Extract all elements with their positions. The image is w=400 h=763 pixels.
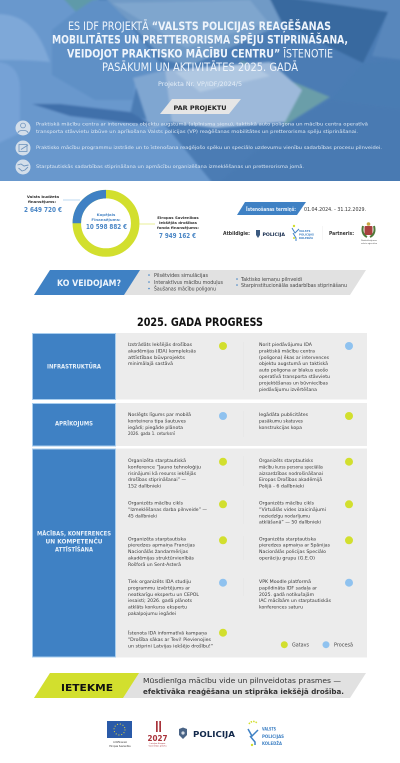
implementation period: Īstenošanas termiņš: <box>246 206 296 213</box>
callout: EU fund: Eiropas Savienības <box>157 215 199 220</box>
item: investigation cycle: 45 dalībnieki <box>128 513 157 519</box>
responsible partners: Atbildīgie: <box>223 231 250 237</box>
item: design: akadēmijas (IDA) kompleksās <box>128 348 197 354</box>
panel: aprikojums <box>32 403 367 446</box>
icon: specialist <box>16 120 30 136</box>
item: exchange Spain: operāciju grupu (G.E.O) <box>259 556 315 562</box>
panel: macibas <box>32 448 367 658</box>
item: tender: operatīvā transporta stāvvietu <box>259 374 330 380</box>
item: investigation cycle: Organizēts mācību cikls <box>128 500 184 506</box>
item: virtual cycle: noziedzīgu nodarījumu <box>259 513 310 519</box>
item: course: Polijā - 6 dalībnieki <box>259 484 304 490</box>
item: course: mācību kurss personu speciālās <box>259 464 323 470</box>
item: conference <box>128 458 227 490</box>
panel: aprikojums: APRĪKOJUMS <box>55 421 93 428</box>
logo: partner emblem: valsts aģentūra <box>361 242 378 245</box>
item: moodle: VPK Moodle platformā <box>259 579 311 585</box>
item: exchange France: Rošforā un Sent-Asterā <box>128 561 181 568</box>
banner: ietekme: IETEKME <box>61 683 113 694</box>
logo: valsts policijas koledza: POLICIJAS <box>262 734 284 740</box>
item: conference: konference “Jauno tehnoloģiju <box>128 464 201 470</box>
item: shooting container: 2026. gada 1. ceturksnī <box>128 431 176 437</box>
item: tender: piedāvājumu izvērtēšana <box>259 386 317 393</box>
logo: EU: Līdzfinansē <box>113 741 127 744</box>
item: conference: 152 dalībnieki <box>128 484 161 490</box>
item: moodle: konferences saturu <box>259 605 303 611</box>
logo: police college <box>292 225 314 241</box>
item: design: attīstības būvprojekts <box>128 355 186 361</box>
logo: 2027: 2027 <box>148 734 168 743</box>
icon: handshake <box>16 160 30 174</box>
donut centre label: 10 598 882 € <box>86 223 127 231</box>
item: design: minimālajā sastāvā <box>128 361 173 367</box>
text: infrastructure: transporta stāvvietu izbūve un aprīkošana Valsts policijas (VP) reaģēšanas mobilitātes un pretterorisma spēju stiprināšanai. <box>36 128 358 135</box>
logo: EU: Eiropas Savienība <box>109 745 131 748</box>
legend: Gatavs <box>292 643 309 649</box>
logo: partner emblem: Nodrošinājuma <box>361 239 378 242</box>
item: stage: konstrukcijas kopa <box>259 425 302 431</box>
item: tender: praktiskā mācību centra <box>259 348 315 354</box>
text: infrastructure <box>36 122 368 134</box>
row label: ATTĪSTĪŠANA <box>55 547 93 554</box>
banner: ko veidojam: KO VEIDOJAM? <box>57 279 121 289</box>
item: tender: auto poligona ar blakus esošo <box>259 367 328 374</box>
banner: ietekme: efektīvāka reaģēšana un stiprāka iekšējā drošība. <box>143 688 344 696</box>
item: stage: pasākumu skatuves <box>259 418 304 424</box>
item: campaign: un stiprini Latvijas iekšējo drošību!" <box>128 642 213 650</box>
heading: par projektu: PAR PROJEKTU <box>174 104 226 112</box>
item: exchange Spain: pieredzes apmaiņa ar Spānijas <box>259 543 331 549</box>
item: design <box>128 341 227 367</box>
item: study evaluation: pakalpojumu iegādei <box>128 611 176 617</box>
item: investigation cycle <box>128 500 227 519</box>
item: shooting container: konteinera tipa šautuves <box>128 417 187 424</box>
logo: 2027: Savienības pilsēta <box>148 744 167 748</box>
title: VEIDOJOT PRAKTISKO MĀCĪBU CENTRU” ĪSTENOTIE <box>67 46 333 60</box>
item: stage: Iegādāta publicitātes <box>259 412 309 418</box>
item: exchange France: Organizēta starptautiska <box>128 536 186 542</box>
donut centre label <box>86 212 127 231</box>
icon: document <box>16 140 30 156</box>
item: exchange Spain <box>259 536 353 562</box>
responsible partners: Partneris: <box>329 231 354 237</box>
item: virtual cycle <box>259 500 353 526</box>
item: course: Organizēts starptautisks <box>259 458 314 464</box>
item: moodle: IAC mācībām un starptautiskās <box>259 598 332 604</box>
callout: state budget: 2 649 720 € <box>24 206 62 214</box>
item: tender <box>259 342 353 393</box>
logo: valsts policijas koledza <box>248 721 284 747</box>
item: conference: drošības stiprināšanai” — <box>128 476 186 483</box>
item: investigation cycle: “Izmeklēšanas darba pilnveide” — <box>128 506 207 513</box>
item: exchange France: pieredzes apmaiņa Francijas <box>128 543 196 549</box>
logo: partner emblem <box>361 222 378 245</box>
banner: ietekme: Mūsdienīga mācību vide un pilnveidotas prasmes — <box>143 677 341 685</box>
banner: ietekme <box>34 673 366 698</box>
item: campaign <box>128 629 227 650</box>
callout: EU fund: 7 949 162 € <box>159 232 196 240</box>
legend <box>281 641 353 649</box>
logo: police college: VALSTS <box>299 229 310 233</box>
item: campaign: "Drošība sākas ar Tevi! Pievienojies <box>128 636 212 643</box>
donut chart: financing <box>77 194 135 252</box>
callout: EU fund: Iekšējās drošības <box>159 220 198 225</box>
item: tender: (poligona) ēkas ar intervences <box>259 355 330 361</box>
logo: policija <box>179 728 236 739</box>
item: study evaluation: neatkarīgu ekspertu un CEPOL <box>128 592 199 598</box>
item: virtual cycle: atklāšanā” — 50 dalībnieki <box>259 519 321 526</box>
list right: Taktisko iemaņu pilnveidi <box>240 277 302 283</box>
item: design: Izstrādāts Iekšējās drošības <box>128 341 193 348</box>
item: course: Eiropas Drošības akadēmijā <box>259 476 322 483</box>
row label <box>37 531 111 554</box>
logo: police college: POLICIJAS <box>299 232 314 236</box>
item: campaign: Īstenota IDA informatīvā kampaņa <box>128 630 207 637</box>
item: exchange France: akadēmijas struktūrvienībās <box>128 556 195 562</box>
item: moodle: papildināta IDF sadaļa ar <box>259 585 317 591</box>
donut centre label: Finansējums: <box>91 217 121 222</box>
title: ES IDF PROJEKTĀ “VALSTS POLICIJAS REAĢĒŠANAS <box>68 18 331 33</box>
item: shooting container <box>128 412 227 437</box>
list left: Pilsētvides simulācijas <box>154 273 208 279</box>
heading: progress: 2025. GADA PROGRESS <box>137 315 263 329</box>
text: cooperation: Starptautiskās sadarbības stiprināšana un apmācību organizēšana izmeklēšanas un pretterorisma jomā. <box>36 163 304 170</box>
project number: Projekta Nr. VP/IDF/2024/5 <box>158 82 242 88</box>
item: study evaluation: Tiek organizēts IDA studiju <box>127 579 191 585</box>
callout: EU fund: fonda finansējums: <box>157 225 199 230</box>
text: infrastructure: Praktiskā mācību centra ar intervences objektu augstumā (alpīnisma sienu), taktiskā auto poligona un mācību centra operatīvā <box>36 122 368 128</box>
logo: 2027: Latvijas Eiropas <box>150 742 165 745</box>
logo: police college: KOLEDŽA <box>299 235 314 240</box>
logo: police: POLICIJA <box>262 232 286 238</box>
list right: Starpinstitucionālās sadarbības stiprināšanu <box>241 282 347 289</box>
item: stage <box>259 412 353 431</box>
legend: Procesā <box>334 643 353 649</box>
logo: valsts policijas koledza: KOLEDŽA <box>262 739 282 747</box>
callout: state budget: Valsts budžeta <box>27 194 60 199</box>
item: course: aizsardzības nodrošināšanai <box>259 470 323 477</box>
item: tender: projektēšanas un būvniecības <box>259 379 329 386</box>
callout: EU fund <box>139 215 199 240</box>
item: virtual cycle: Organizēts mācību cikls <box>259 500 315 506</box>
implementation period: 01.04.2024. - 31.12.2029. <box>304 207 366 213</box>
donut centre label: Kopējais <box>97 212 116 217</box>
list left: Interaktīvus mācību moduļus <box>154 280 223 286</box>
item: study evaluation <box>127 579 227 617</box>
item: course <box>259 458 353 490</box>
item: shooting container: Noslēgts līgums par mobilā <box>128 412 191 418</box>
logo: policija: POLICIJA <box>193 730 236 739</box>
logo: valsts policijas koledza: VALSTS <box>262 726 276 732</box>
panel: infrastruktura <box>32 333 367 400</box>
item: study evaluation: atklāts konkurss ekspertu <box>128 605 187 611</box>
item: exchange France <box>128 536 227 568</box>
list left: Šaušanas mācību poligonu <box>154 286 216 292</box>
item: tender: Norit piedāvājumu IDA <box>259 342 313 348</box>
item: shooting container: iegādi; piegāde plānota <box>128 425 183 431</box>
list left <box>148 273 223 292</box>
item: moodle <box>259 579 353 611</box>
item: study evaluation: programmu izvērtējums ar <box>128 585 190 591</box>
list right <box>236 277 347 289</box>
implementation period <box>237 202 366 215</box>
logo: police <box>256 230 286 238</box>
callout: state budget: finansējums: <box>28 199 56 204</box>
item: study evaluation: iesaisti; 2026. gadā plānots <box>128 598 193 604</box>
title <box>52 18 348 74</box>
heading: par projektu <box>160 99 241 114</box>
item: tender: objektu augstumā un taktiskā <box>259 361 328 367</box>
item: exchange Spain: Organizēta starptautiska <box>259 536 316 542</box>
item: exchange France: Nacionālās žandarmērijas <box>128 548 189 555</box>
item: exchange Spain: Nacionālās policijas Speciālo <box>259 549 326 555</box>
text: programme: Praktisko mācību programmu izstrāde un to īstenošana reaģējošo spēku un speciālo uzdevumu vienību sadarbības procesu pilnveidei. <box>36 144 382 151</box>
item: conference: risinājumi kā resurss iekšējās <box>128 470 197 477</box>
header panel <box>0 0 400 186</box>
row label: MĀCĪBAS, KONFERENCES <box>37 531 111 538</box>
responsible partners <box>223 222 378 245</box>
banner: ko veidojam <box>34 270 366 295</box>
item: virtual cycle: “Virtuālās vides izaicinājumi <box>259 507 326 513</box>
panel: infrastruktura: INFRASTRUKTŪRA <box>47 364 101 370</box>
title: PASĀKUMI UN AKTIVITĀTES 2025. GADĀ <box>102 60 298 74</box>
item: moodle: 2025. gadā notikušajām <box>259 591 314 598</box>
logo: EU <box>107 721 132 748</box>
logo: 2027 <box>148 721 168 748</box>
row label: UN KOMPETENČU <box>46 539 103 546</box>
callout: state budget <box>24 194 80 214</box>
item: conference: Organizēta starptautiskā <box>128 458 186 464</box>
